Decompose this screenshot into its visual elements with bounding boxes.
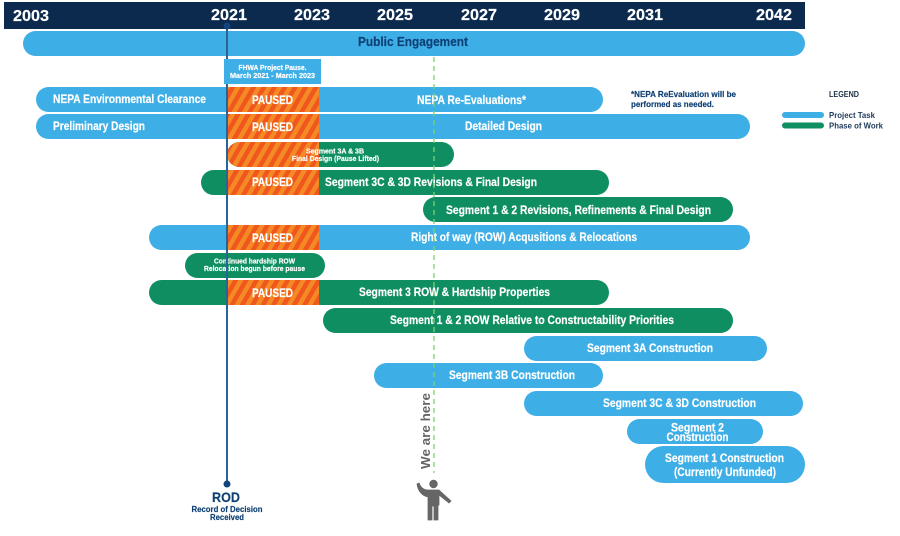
legend: LEGEND: [829, 90, 859, 99]
timeline header: 2003: [13, 8, 49, 25]
bar: continued hardship ROW: Relocation begun before pause: [204, 264, 305, 273]
bar: segment 3 ROW and hardship properties: PAUSED: [252, 288, 293, 300]
bar: segment 1 construction: Segment 1 Construction: [665, 453, 784, 465]
bar: NEPA environmental clearance and re-evaluations: [36, 87, 603, 112]
timeline header: 2031: [627, 7, 663, 24]
bar: segment 2 construction: Segment 2: [671, 422, 724, 434]
bar: right of way acquisitions: [149, 225, 750, 250]
bar: public engagement: Public Engagement: [358, 35, 469, 49]
ROD vertical line: [224, 22, 230, 488]
bar: segment 3B construction: [374, 363, 603, 388]
bar: preliminary and detailed design: PAUSED: [252, 122, 293, 134]
callout: FHWA project pause: [224, 59, 321, 84]
timeline header: [4, 2, 805, 29]
bar: segment 3B construction: Segment 3B Construction: [449, 370, 575, 382]
timeline header: 2021: [211, 7, 247, 24]
ROD label: ROD: [212, 489, 240, 505]
bar: segment 2 construction: Construction: [666, 432, 728, 444]
bar: right of way acquisitions: PAUSED: [252, 233, 293, 245]
ROD label: Received: [210, 513, 244, 522]
legend: Project Task: [829, 110, 875, 120]
bar: right of way acquisitions: Right of way (ROW) Acqusitions & Relocations: [411, 232, 637, 244]
ROD label: Record of Decision: [192, 505, 263, 514]
bar: public engagement: [23, 31, 805, 56]
bar: segment 3C and 3D revisions: PAUSED: [252, 177, 293, 189]
bar: segment 3C and 3D construction: [524, 391, 803, 416]
bar: continued hardship ROW: Continued hardship ROW: [214, 256, 295, 266]
bar: segment 3C and 3D revisions: [201, 170, 609, 195]
bar: preliminary and detailed design: Preliminary Design: [53, 121, 145, 133]
bar: segment 1 and 2 revisions: Segment 1 & 2 Revisions, Refinements & Final Design: [446, 205, 711, 217]
bar: NEPA environmental clearance and re-evaluations: PAUSED: [252, 95, 293, 107]
bar: segment 3A construction: [524, 336, 767, 361]
timeline header: 2027: [461, 7, 497, 24]
timeline header: 2023: [294, 7, 330, 24]
bar: segment 3A and 3B final design: Segment 3A & 3B: [306, 146, 364, 156]
bar: NEPA environmental clearance and re-evaluations: NEPA Re-Evaluations*: [417, 95, 526, 107]
bar: segment 3A construction: Segment 3A Construction: [587, 343, 713, 355]
bar: segment 1 and 2 ROW: Segment 1 & 2 ROW Relative to Constructability Priorities: [390, 315, 674, 327]
we are here label: We are here: [418, 393, 433, 469]
note: NEPA re-evaluation: *NEPA ReEvaluation will be: [631, 89, 736, 99]
bar: preliminary and detailed design: [36, 114, 750, 139]
bar: segment 3A and 3B final design: Final Design (Pause Lifted): [292, 154, 380, 163]
bar: segment 3 ROW and hardship properties: Segment 3 ROW & Hardship Properties: [359, 287, 550, 299]
bar: preliminary and detailed design: Detailed Design: [465, 121, 542, 133]
bar: segment 1 construction: (Currently Unfunded): [674, 467, 776, 479]
bar: segment 3A and 3B final design: [227, 142, 454, 167]
bar: segment 3C and 3D construction: Segment 3C & 3D Construction: [603, 398, 756, 410]
ROD label: [192, 489, 263, 522]
bar: segment 1 and 2 revisions: [423, 197, 733, 222]
we are here dashed line: [433, 57, 435, 473]
bar: segment 2 construction: [627, 419, 763, 444]
bar: segment 3 ROW and hardship properties: [149, 280, 609, 305]
callout: FHWA project pause: FHWA Project Pause.: [238, 63, 306, 72]
legend: [782, 90, 883, 130]
bar: continued hardship ROW: [185, 253, 325, 278]
bar: NEPA environmental clearance and re-evaluations: NEPA Environmental Clearance: [53, 94, 206, 106]
bar: segment 1 and 2 ROW: [323, 308, 733, 333]
callout: FHWA project pause: March 2021 - March 2023: [230, 71, 315, 80]
bar: segment 1 construction: [645, 446, 805, 483]
timeline header: 2029: [544, 7, 580, 24]
bar: segment 3C and 3D revisions: Segment 3C & 3D Revisions & Final Design: [325, 177, 537, 189]
note: NEPA re-evaluation: [631, 89, 736, 109]
icon: waving person: [417, 480, 451, 520]
timeline header: 2025: [377, 7, 413, 24]
timeline header: 2042: [756, 7, 792, 24]
legend: Phase of Work: [829, 120, 883, 130]
note: NEPA re-evaluation: performed as needed.: [631, 99, 714, 109]
